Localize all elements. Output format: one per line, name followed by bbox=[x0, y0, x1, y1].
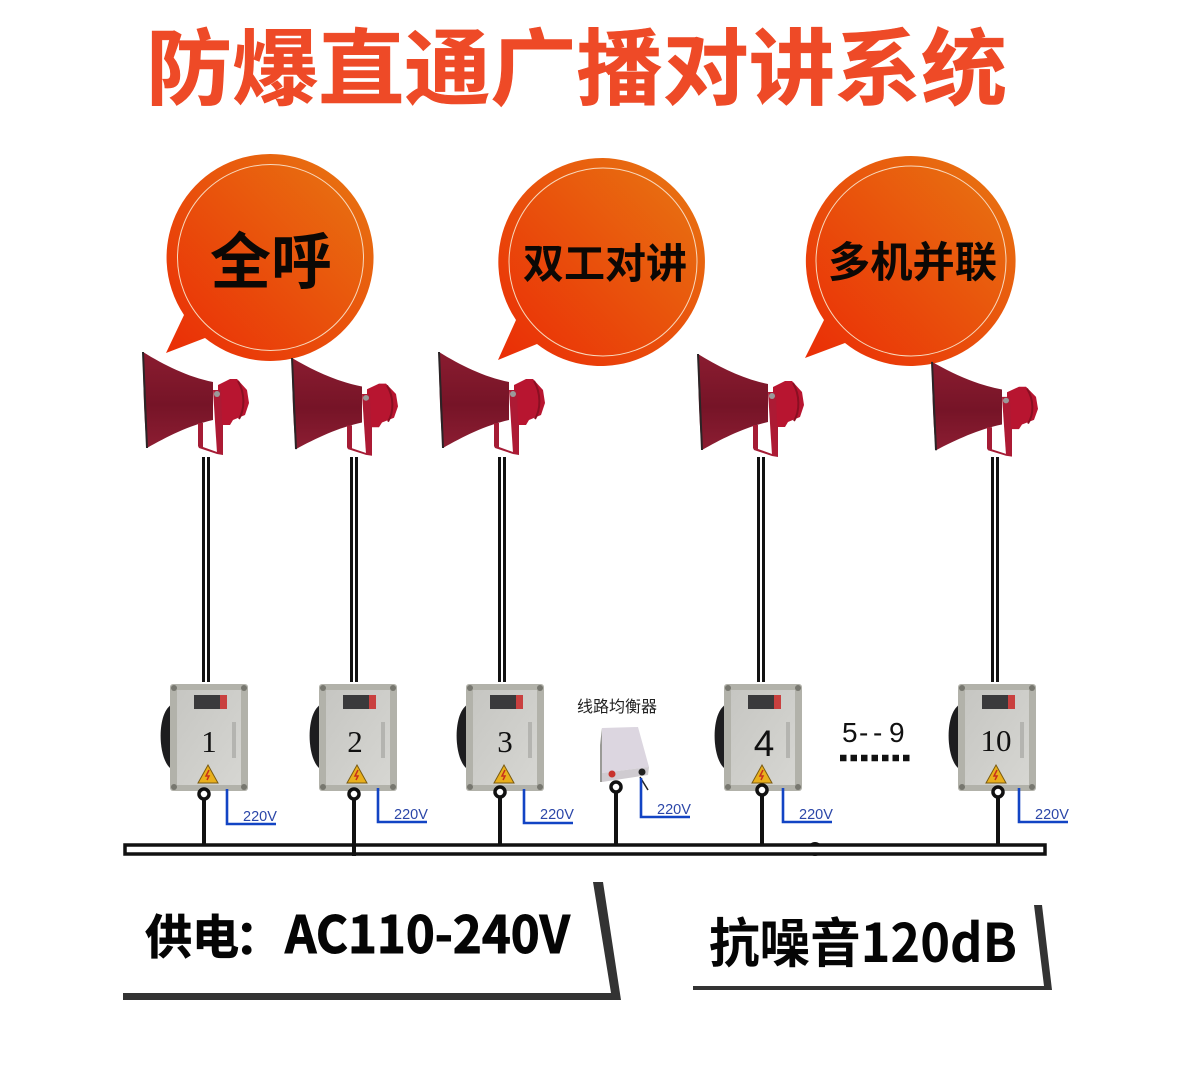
callout: power supply bbox=[123, 882, 621, 1000]
units 5 to 9 label: 5--9 bbox=[842, 717, 905, 748]
callout: power supply: 供电 bbox=[145, 899, 239, 968]
speech bubble: full call: 全呼 bbox=[210, 212, 332, 301]
220V feed 1 bbox=[227, 789, 277, 825]
220V feed 10: 220V bbox=[1035, 807, 1069, 823]
title: 防爆直通广播对讲系统 bbox=[146, 2, 1007, 122]
line equalizer device bbox=[600, 727, 649, 790]
speaker cables bbox=[202, 457, 999, 682]
intercom box 1: 1 bbox=[201, 724, 217, 759]
horn speaker 2 bbox=[291, 358, 398, 456]
callout: power supply: AC110-240V bbox=[284, 894, 570, 968]
220V feed equalizer bbox=[641, 778, 691, 818]
intercom box 2: 2 bbox=[347, 724, 363, 759]
intercom box 2 bbox=[310, 684, 397, 791]
speech bubble: duplex intercom bbox=[498, 158, 705, 366]
220V feed 10 bbox=[1019, 788, 1069, 823]
220V feed 2 bbox=[378, 788, 428, 823]
220V feed 2: 220V bbox=[394, 807, 428, 823]
intercom box 4 bbox=[715, 684, 802, 791]
220V feed 3: 220V bbox=[540, 807, 574, 823]
horn speaker 4 bbox=[697, 354, 804, 457]
horn speaker 5 bbox=[931, 362, 1038, 457]
220V feed equalizer: 220V bbox=[657, 802, 691, 818]
speech bubble: full call bbox=[166, 154, 374, 361]
intercom box 4: 4 bbox=[754, 723, 774, 764]
line equalizer label: 线路均衡器 bbox=[577, 693, 657, 717]
intercom box 10: 10 bbox=[980, 723, 1012, 758]
units 5 to 9 label bbox=[840, 717, 912, 758]
callout: power supply: ： bbox=[235, 899, 282, 968]
power bus bbox=[125, 842, 1045, 856]
intercom box 3 bbox=[457, 684, 544, 791]
horn speaker 1 bbox=[142, 352, 249, 455]
intercom box 3: 3 bbox=[497, 724, 513, 759]
220V feed 1: 220V bbox=[243, 809, 277, 825]
horn speaker 3 bbox=[438, 352, 545, 455]
speech bubble: duplex intercom: 双工对讲 bbox=[523, 230, 687, 290]
speech bubble: multi-unit parallel: 多机并联 bbox=[828, 229, 997, 290]
220V feed 4 bbox=[783, 788, 833, 823]
220V feed 3 bbox=[524, 789, 574, 823]
speech bubble: multi-unit parallel bbox=[805, 156, 1016, 366]
220V feed 4: 220V bbox=[799, 807, 833, 823]
intercom box 1 bbox=[161, 684, 248, 791]
bus connectors bbox=[199, 782, 1003, 856]
intercom box 10 bbox=[949, 684, 1036, 791]
callout: noise resistance: 抗噪音120dB bbox=[709, 902, 1017, 978]
